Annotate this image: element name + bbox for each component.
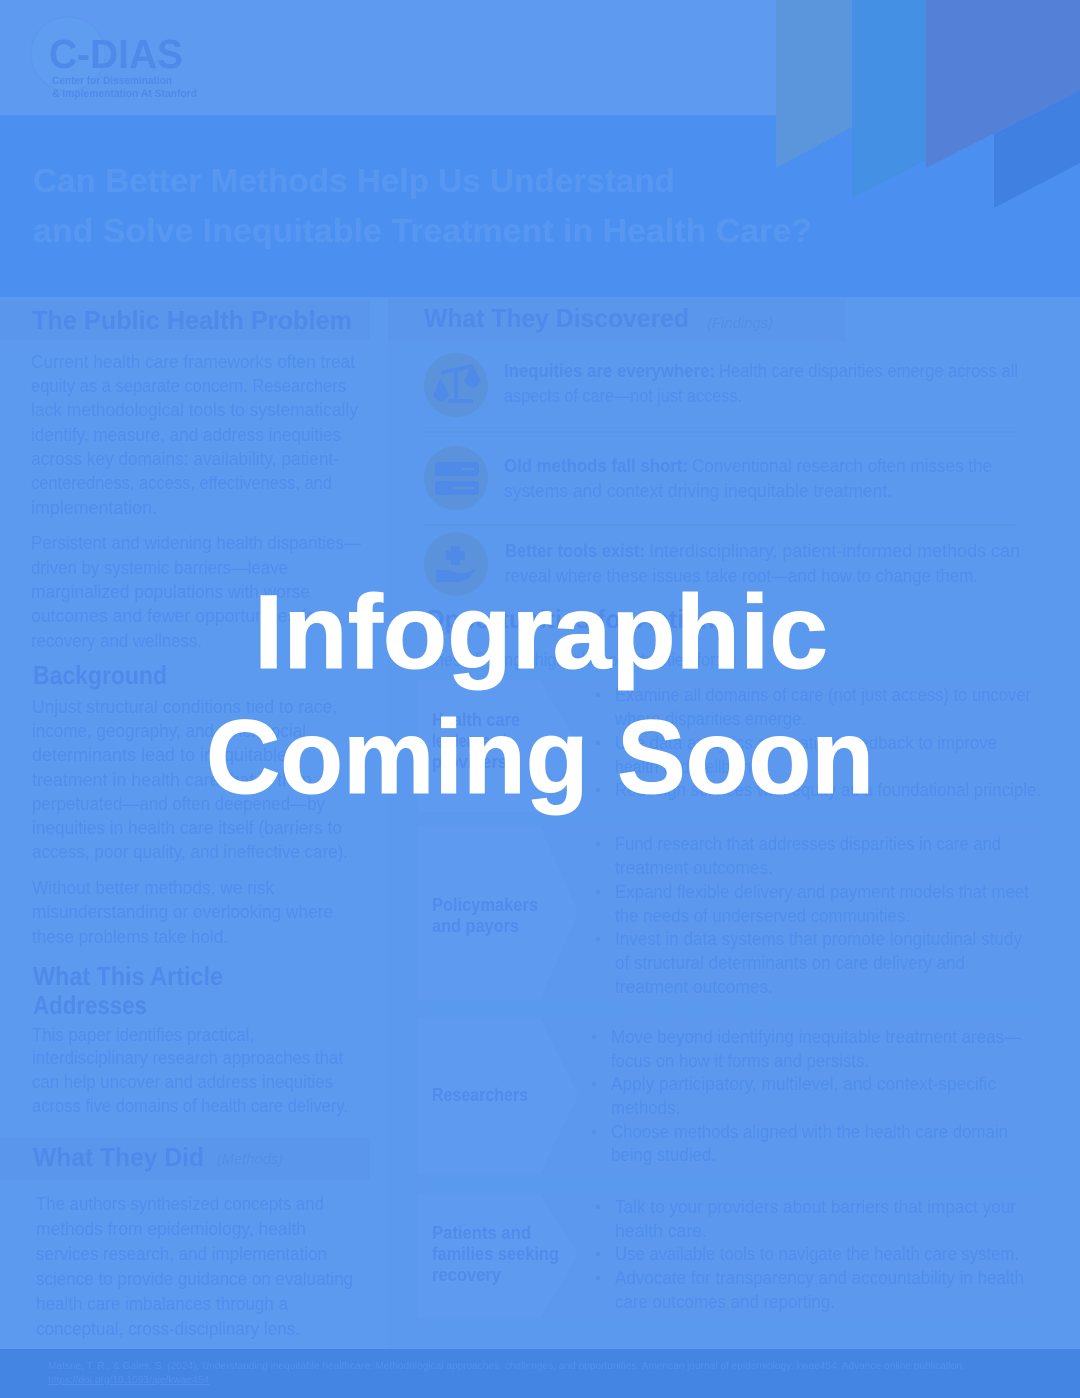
finding: better tools exist: Better tools exist: (505, 541, 645, 561)
panel: health care leaders and providers: Redesign services with equity as a foundational principle. (615, 779, 1041, 800)
title: and Solve Inequitable Treatment in Health Care? (33, 212, 812, 249)
panel: health care leaders and providers: providers (432, 751, 507, 772)
text block: background (32, 696, 348, 947)
panel: researchers: focus on how it forms and persists. (611, 1050, 869, 1071)
heading: Background: Background (33, 660, 167, 690)
text block: what this article addresses: can help uncover and address inequities (32, 1071, 333, 1092)
icon: balance scale (424, 353, 488, 417)
text block: background: Without better methods, we risk (32, 877, 275, 898)
text block: public health problem: recovery and wellness. (31, 630, 202, 651)
finding: old methods fall short (424, 446, 992, 510)
panel: patients and families seeking recovery: Talk to your providers about barriers that impact your (615, 1196, 1016, 1217)
finding: inequities are everywhere: aspects of care—not just access. (504, 385, 742, 406)
finding: inequities are everywhere (424, 353, 1018, 417)
heading band: What They Did (Methods): (Methods) (217, 1151, 283, 1168)
panel: policymakers and payors: Policymakers (432, 894, 538, 915)
overlay: Infographic Coming Soon (206, 574, 874, 816)
finding: inequities are everywhere: Health care disparities emerge across all (719, 360, 1018, 381)
text block: public health problem: implementation. (31, 497, 157, 518)
text block: public health problem: across key domains: availability, patient- (31, 448, 339, 469)
text block: public health problem: equity as a separate concern. Researchers (31, 375, 346, 396)
footer: citation: https://doi.org/10.1093/aje/kwae454 (48, 1374, 209, 1386)
logo: C-DIAS: & Implementation At Stanford (52, 88, 197, 100)
panel: researchers: Choose methods aligned with the health care domain (611, 1121, 1008, 1142)
logo: C-DIAS: C-DIAS (49, 31, 183, 77)
finding: old methods fall short: Conventional research often misses the (692, 455, 992, 476)
panel: right column backdrop (388, 297, 1080, 1349)
icon: stacked bars (424, 446, 488, 510)
footer: citation: Matsne, T. R., & Gales, S. (2024). Understanding inequitable healthcare: Methodological approaches, challenges, and opportunities. American journal of epidemiology, kwae454. Advance online publication. (48, 1360, 965, 1372)
panel: health care leaders and providers: Health care (432, 709, 520, 730)
finding: old methods fall short: Old methods fall short: (504, 456, 688, 476)
title: Can Better Methods Help Us Understand (33, 162, 675, 199)
panel: policymakers and payors: treatment outcomes. (615, 857, 773, 878)
finding: old methods fall short: systems and context driving inequitable treatment. (504, 480, 892, 501)
panel: policymakers and payors: the needs of underserved communities. (615, 905, 910, 926)
panel: patients and families seeking recovery (418, 1194, 1042, 1318)
text block: public health problem: identify, measure, and address inequities (31, 424, 341, 445)
panel: patients and families seeking recovery: Advocate for transparency and accountability in health (615, 1267, 1024, 1288)
panel: health care leaders and providers: leaders and (432, 730, 507, 751)
panel: policymakers and payors: treatment outcomes. (615, 976, 773, 997)
heading band: The Public Health Problem (0, 300, 370, 340)
panel: policymakers and payors: Fund research that addresses disparities in care and (615, 833, 1001, 854)
text block: background: determinants lead to inequitable (32, 744, 287, 765)
icon: hand with plus (424, 532, 488, 596)
text block: background: inequities in health care itself (barriers to (32, 817, 342, 838)
footer: citation (0, 1349, 1080, 1398)
text block: public health problem: centeredness, access, effectiveness, and (31, 472, 332, 493)
title (33, 162, 812, 249)
heading band: What They Did (Methods) (0, 1138, 370, 1180)
panel: health care leaders and providers: Examine all domains of care (not just access) to uncover (615, 684, 1031, 705)
text: opportunities intro: These findings highlight opportunities for: (425, 649, 720, 670)
finding: better tools exist: reveal where these issues take root—and how to change them. (505, 565, 978, 586)
text block: what this article addresses: across five domains of health care delivery. (32, 1095, 348, 1116)
text block: public health problem: Current health care frameworks often treat (31, 351, 355, 372)
panel: health care leaders and providers: Use data analytics and patient feedback to improve (615, 732, 997, 753)
text block: public health problem: marginalized populations with worse (31, 581, 310, 602)
header banner (0, 0, 1080, 297)
text block: methods: methods from epidemiology, health (36, 1218, 306, 1239)
panel: health care leaders and providers: health and wellbeing. (615, 756, 765, 777)
panel: patients and families seeking recovery: Use available tools to navigate the health care system. (615, 1243, 1019, 1264)
text block: what this article addresses: This paper identifies practical, (32, 1024, 254, 1045)
panel: researchers: Move beyond identifying inequitable treatment areas— (611, 1026, 1021, 1047)
panel: patients and families seeking recovery: recovery (432, 1264, 502, 1285)
panel: researchers: Apply participatory, multilevel, and context-specific (611, 1073, 996, 1094)
text block: background: treatment in health care that is then (32, 769, 312, 790)
panel: health care leaders and providers: where disparities emerge. (614, 708, 806, 729)
panel: policymakers and payors: Invest in data systems that promote longitudinal study (615, 928, 1023, 949)
text block: public health problem: Persistent and widening health disparities— (31, 532, 361, 553)
finding: inequities are everywhere: Inequities are everywhere: (504, 361, 715, 381)
panel: researchers: being studied. (611, 1144, 716, 1165)
panel: patients and families seeking recovery: health care. (615, 1220, 707, 1241)
panel: patients and families seeking recovery: families seeking (432, 1243, 559, 1264)
panel: policymakers and payors (418, 826, 1042, 1000)
heading: What This Article Addresses: What This Article (33, 961, 223, 991)
panel: researchers: methods. (611, 1097, 680, 1118)
text block: background: misunderstanding or overlooking where (32, 901, 333, 922)
panel: policymakers and payors: of structural determinants on care delivery and (615, 952, 965, 973)
overlay: Infographic Coming Soon: Infographic (254, 574, 828, 691)
panel: researchers: Researchers (432, 1084, 528, 1105)
heading band: What They Discovered (Findings) (388, 298, 845, 342)
heading band: The Public Health Problem: The Public Health Problem (32, 305, 352, 335)
text block: background: these problems take hold. (32, 926, 228, 947)
text block: what this article addresses: interdisciplinary research approaches that (32, 1047, 343, 1068)
text block: background: income, geography, and other social (32, 720, 306, 741)
heading band: What They Discovered (Findings): (Findings) (707, 315, 773, 332)
panel: policymakers and payors: Expand flexible delivery and payment models that meet (615, 881, 1029, 902)
text block: public health problem: outcomes and fewer opportunities for (31, 605, 322, 626)
text block: methods: services research, and implementation (36, 1243, 327, 1264)
heading band: What They Did (Methods): What They Did (33, 1142, 204, 1172)
logo: C-DIAS: Center for Dissemination (52, 75, 172, 87)
panel: policymakers and payors: and payors (432, 915, 519, 936)
text block: public health problem (31, 351, 361, 651)
panel: health care leaders and providers (418, 680, 1042, 812)
finding: better tools exist (424, 532, 1020, 596)
panel: left column backdrop (0, 297, 370, 1349)
logo: C-DIAS (31, 17, 197, 100)
text block: methods (36, 1193, 353, 1339)
text block: methods: science to provide guidance on evaluating (36, 1268, 353, 1289)
text block: methods: The authors synthesized concepts and (36, 1193, 324, 1214)
text block: methods: health care imbalances through a (36, 1293, 289, 1314)
heading: What This Article Addresses (33, 961, 223, 1020)
text block: public health problem: driven by systemic barriers—leave (31, 557, 288, 578)
overlay: Infographic Coming Soon: Coming Soon (206, 699, 874, 816)
panel: patients and families seeking recovery: care outcomes and reporting. (615, 1291, 835, 1312)
text block: background: access, poor quality, and ineffective care). (32, 841, 348, 862)
heading: Opportunities for Action: Opportunities for Action (425, 604, 715, 634)
text block: background: perpetuated—and often deepened—by (32, 793, 326, 814)
panel: patients and families seeking recovery: Patients and (432, 1222, 531, 1243)
heading band: What They Discovered (Findings): What They Discovered (424, 303, 689, 333)
decorative ribbons (776, 0, 1080, 208)
text block: public health problem: lack methodological tools to systematically (31, 399, 359, 420)
text block: what this article addresses (32, 1024, 348, 1116)
text block: methods: conceptual, cross-disciplinary lens. (36, 1318, 300, 1339)
panel: researchers (418, 1018, 1042, 1174)
heading: What This Article Addresses: Addresses (33, 990, 147, 1020)
text block: background: Unjust structural conditions tied to race, (32, 696, 337, 717)
finding: better tools exist: Interdisciplinary, patient-informed methods can (649, 540, 1020, 561)
